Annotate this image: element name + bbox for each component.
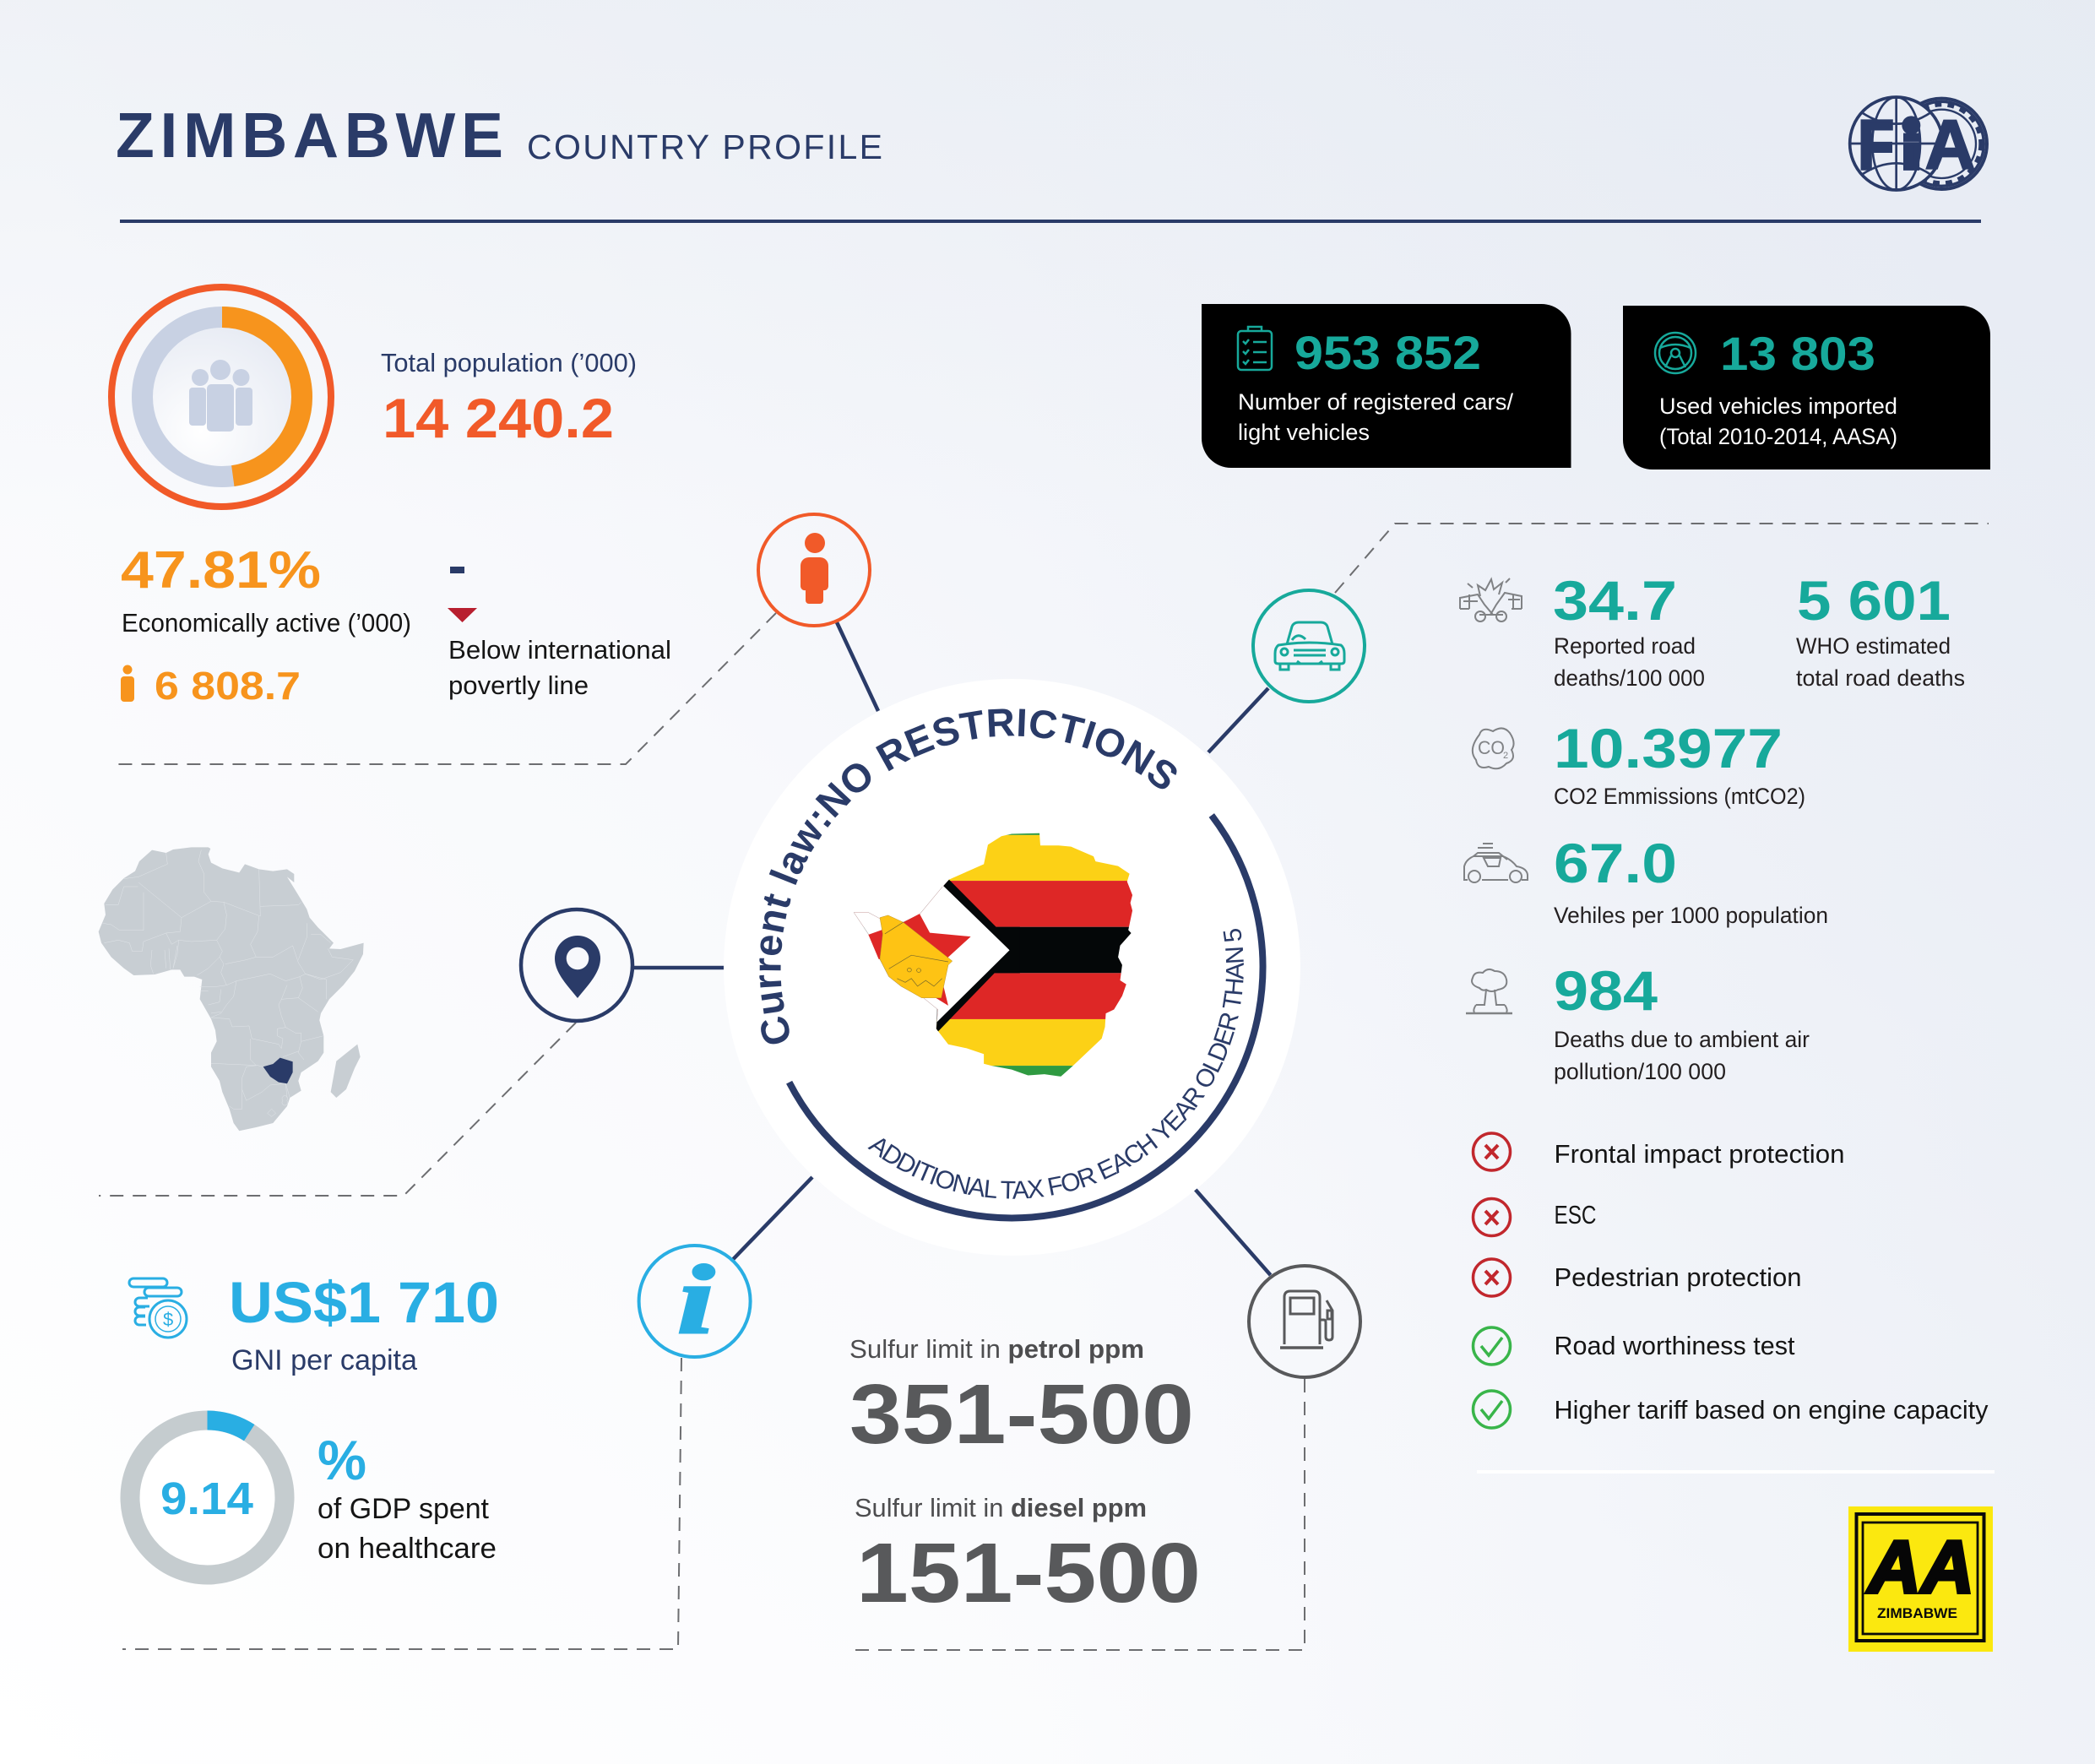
- icon: crash: [1460, 578, 1522, 621]
- economically active value: 6 808.7: [155, 664, 301, 708]
- poverty label: povertly line: [448, 670, 589, 700]
- logo: FIA: [1850, 97, 1987, 190]
- used vehicles label: [1659, 394, 1897, 449]
- navy arc: [790, 816, 1262, 1218]
- icon: side car: [1464, 844, 1528, 882]
- WHO estimate label: total road deaths: [1796, 665, 1965, 691]
- curved note: additional tax: ADDITIONAL TAX FOR EACH YEAR OLDER THAN 5: [868, 929, 1244, 1199]
- healthcare label: on healthcare: [318, 1533, 497, 1565]
- item: frontal impact protection: Frontal impact protection: [1554, 1139, 1844, 1169]
- poverty dash value: [450, 567, 464, 573]
- icon: person orange small: [121, 665, 134, 702]
- poverty label: [448, 635, 671, 700]
- registered cars label: [1238, 389, 1514, 445]
- icon: info circle: [639, 1246, 751, 1357]
- WHO estimate label: WHO estimated: [1796, 633, 1951, 659]
- item: road worthiness test: Road worthiness test: [1554, 1331, 1795, 1360]
- icon: location circle: [521, 909, 632, 1021]
- item: frontal impact protection: [1473, 1133, 1844, 1170]
- air pollution label: Deaths due to ambient air: [1554, 1027, 1810, 1052]
- title: COUNTRY PROFILE: [527, 128, 882, 166]
- economically active label: Economically active (’000): [122, 608, 411, 638]
- icon: Zimbabwe flag map: [848, 829, 1142, 1081]
- petrol label: Sulfur limit in petrol ppm: [849, 1334, 1144, 1364]
- item: higher tariff: Higher tariff based on engine capacity: [1554, 1395, 1989, 1425]
- item: pedestrian protection: Pedestrian protection: [1554, 1262, 1802, 1292]
- reported deaths value: 34.7: [1553, 569, 1677, 632]
- item: ESC: ESC: [1554, 1200, 1596, 1229]
- registered cars label: light vehicles: [1238, 420, 1370, 445]
- icon: coins: [129, 1278, 187, 1338]
- icon: clipboard: [1238, 327, 1272, 370]
- icon: person circle: [758, 514, 870, 626]
- CO2 label: CO2 Emmissions (mtCO2): [1554, 784, 1805, 809]
- icon: fuel pump circle: [1249, 1266, 1360, 1377]
- air pollution label: [1554, 1027, 1810, 1084]
- title: ZIMBABWE: [116, 100, 503, 171]
- GNI value: US$1 710: [229, 1270, 499, 1335]
- logo: FIA: F: [1859, 106, 1894, 183]
- icon: coins: $: [163, 1309, 173, 1330]
- card: registered cars: [1202, 304, 1571, 468]
- curved heading: current law: Current law:NO RESTRICTIONS: [759, 709, 1177, 1044]
- healthcare donut: 9.14: [160, 1474, 253, 1524]
- icon: CO2 cloud: [1473, 728, 1514, 768]
- icon: down triangle: [448, 608, 477, 622]
- WHO estimate label: [1796, 633, 1965, 691]
- item: pedestrian protection: [1473, 1259, 1802, 1296]
- WHO estimate value: 5 601: [1797, 569, 1951, 632]
- healthcare label: of GDP spent: [318, 1493, 490, 1525]
- total population value: 14 240.2: [383, 387, 614, 449]
- panel: economy and health: [129, 1270, 499, 1575]
- healthcare label: [318, 1493, 497, 1565]
- card: used vehicles: [1623, 306, 1990, 469]
- logo: AA Zimbabwe: AA: [1866, 1525, 1974, 1609]
- logo: AA Zimbabwe: [1848, 1506, 1993, 1652]
- item: ESC: [1473, 1199, 1596, 1236]
- diesel value: 151-500: [856, 1526, 1201, 1620]
- logo: AA Zimbabwe: ZIMBABWE: [1877, 1606, 1957, 1621]
- reported deaths label: [1554, 633, 1705, 691]
- used vehicles label: (Total 2010-2014, AASA): [1659, 424, 1897, 449]
- item: higher tariff: [1473, 1391, 1989, 1428]
- dashed connectors: [99, 524, 1989, 1650]
- total population label: Total population (’000): [381, 348, 637, 377]
- economically active percent: 47.81%: [121, 541, 321, 600]
- icon: pollution cloud: [1466, 969, 1512, 1013]
- CO2 value: 10.3977: [1554, 717, 1783, 779]
- reported deaths label: Reported road: [1554, 633, 1696, 659]
- petrol value: 351-500: [849, 1367, 1194, 1462]
- registered cars value: 953 852: [1294, 326, 1481, 379]
- used vehicles value: 13 803: [1720, 327, 1875, 380]
- icon: CO2 cloud: CO: [1478, 737, 1505, 758]
- logo: FIA: A: [1925, 106, 1975, 183]
- registered cars label: Number of registered cars/: [1238, 389, 1514, 415]
- solid connectors: [633, 622, 1271, 1275]
- icon: CO2 cloud: 2: [1503, 751, 1508, 761]
- map: Africa: [99, 847, 364, 1131]
- icon: steering wheel: [1655, 333, 1696, 373]
- central circle: [759, 679, 1300, 1221]
- air pollution label: pollution/100 000: [1554, 1059, 1726, 1084]
- used vehicles label: Used vehicles imported: [1659, 394, 1897, 419]
- vehicles per 1000 value: 67.0: [1554, 832, 1677, 894]
- poverty label: Below international: [448, 635, 671, 665]
- logo: FIA: i: [1902, 126, 1922, 178]
- diesel label: Sulfur limit in diesel ppm: [855, 1493, 1147, 1522]
- population donut: [111, 287, 331, 507]
- panel: sulfur limits: [849, 1334, 1201, 1620]
- title: [116, 100, 882, 171]
- GNI label: GNI per capita: [231, 1344, 417, 1376]
- panel: population: [111, 287, 671, 708]
- air pollution value: 984: [1554, 959, 1658, 1022]
- vehicles per 1000 label: Vehiles per 1000 population: [1554, 903, 1828, 928]
- panel: road statistics: [1460, 569, 1965, 1084]
- panel: safety checklist: [1473, 1133, 1989, 1428]
- item: road worthiness test: [1473, 1327, 1795, 1365]
- percent sign: %: [318, 1429, 366, 1491]
- icon: car circle: [1253, 590, 1365, 702]
- healthcare donut: [130, 1420, 285, 1575]
- reported deaths label: deaths/100 000: [1554, 665, 1705, 691]
- icon: info circle: i: [677, 1246, 714, 1354]
